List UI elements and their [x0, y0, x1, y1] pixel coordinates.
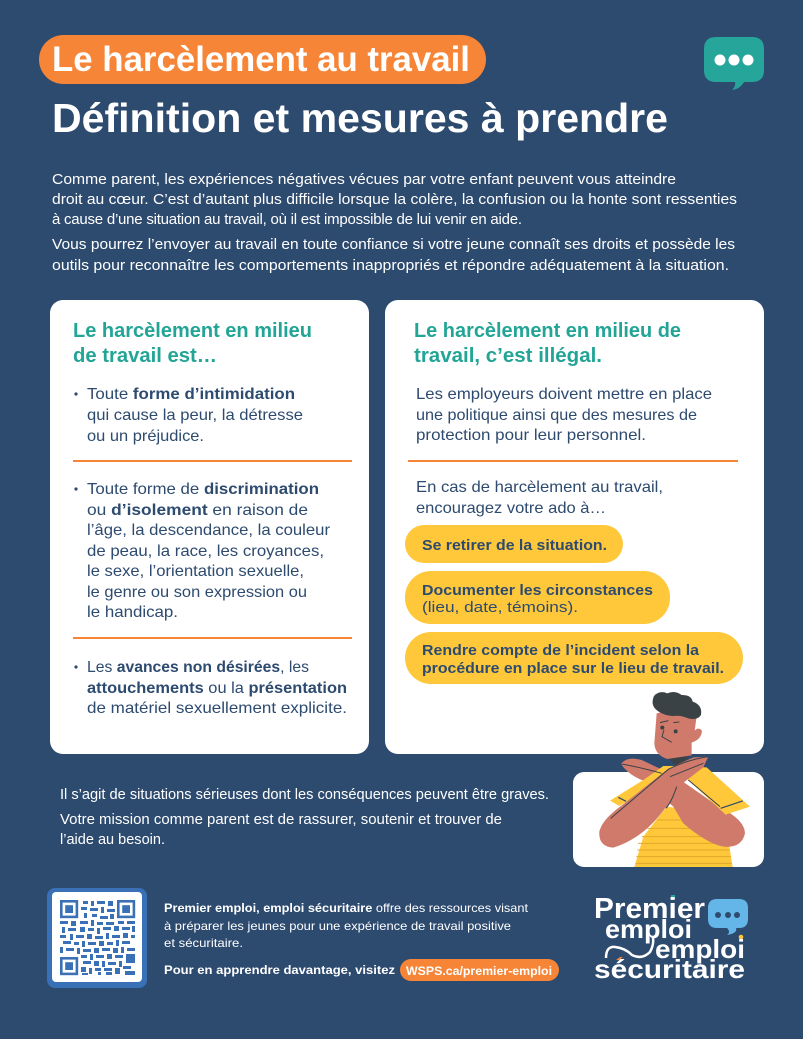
list item: intimidation: Toute forme d’intimidation — [87, 386, 295, 403]
intro text: à cause d’une situation au travail, où il est impossible de lui venir en aide. — [52, 211, 522, 228]
intro text: Vous pourrez l’envoyer au travail en toute confiance si votre jeune connaît ses droits et possède les — [52, 236, 735, 253]
list item: discrimination: ou d’isolement en raison de — [87, 502, 308, 519]
heading: illegal — [414, 320, 681, 367]
text: program description: Premier emploi, emploi sécuritaire offre des ressources visant — [164, 901, 529, 915]
text: employers: Les employeurs doivent mettre en place — [416, 386, 712, 403]
pill: step 3: Rendre compte de l’incident selon la — [422, 642, 700, 659]
pill: step 2: Documenter les circonstances — [422, 582, 653, 599]
list item: avances: Les avances non désirées, les — [87, 659, 309, 676]
list item: discrimination: le sexe, l’orientation sexuelle, — [87, 563, 304, 580]
list item: intimidation: qui cause la peur, la détresse — [87, 407, 303, 424]
logo: Premier emploi, emploi sécuritaire: Premier — [594, 893, 705, 925]
illustration: person crossing arms — [599, 692, 750, 867]
QR code — [47, 888, 147, 988]
text: encourage: En cas de harcèlement au travail, — [416, 479, 663, 496]
link pill — [400, 959, 559, 981]
text: encourage — [416, 479, 663, 517]
list item: discrimination: l’âge, la descendance, la couleur — [87, 522, 331, 539]
list item: avances — [74, 659, 347, 717]
text: program description: Pour en apprendre davantage, visitez — [164, 963, 395, 977]
list item: avances: attouchements ou la présentation — [87, 680, 347, 697]
list item: discrimination: le handicap. — [87, 604, 178, 621]
heading: definition: Le harcèlement en milieu — [73, 320, 312, 342]
text: encourage: encouragez votre ado à… — [416, 500, 606, 517]
logo: Premier emploi, emploi sécuritaire: emploi — [655, 934, 745, 964]
list item: intimidation: ou un préjudice. — [87, 428, 204, 445]
list item: avances: de matériel sexuellement explicite. — [87, 700, 347, 717]
heading: definition — [73, 320, 312, 367]
intro text: Comme parent, les expériences négatives vécues par votre enfant peuvent vous atteindre — [52, 171, 676, 188]
text: employers: une politique ainsi que des mesures de — [416, 407, 697, 424]
list item: intimidation — [74, 386, 303, 445]
heading: illegal: Le harcèlement en milieu de — [414, 320, 681, 342]
text: conclusion — [60, 786, 549, 848]
logo: Premier emploi, emploi sécuritaire — [594, 893, 748, 984]
heading: illegal: travail, c’est illégal. — [414, 345, 602, 367]
panel: definition — [50, 300, 369, 754]
list item: discrimination: le genre ou son expression ou — [87, 584, 307, 601]
panel: person background — [573, 772, 764, 867]
icon: chat bubble — [704, 37, 764, 90]
text: conclusion: Il s’agit de situations sérieuses dont les conséquences peuvent être graves. — [60, 786, 549, 803]
list item: discrimination — [74, 481, 331, 621]
list item: discrimination: Toute forme de discrimination — [87, 481, 319, 498]
logo: Premier emploi, emploi sécuritaire: emploi — [605, 914, 692, 944]
pill: step 3 — [405, 632, 743, 684]
text: conclusion: l’aide au besoin. — [60, 831, 165, 848]
text: conclusion: Votre mission comme parent est de rassurer, soutenir et trouver de — [60, 811, 502, 828]
list item: discrimination: de peau, la race, les croyances, — [87, 543, 324, 560]
link pill: WSPS.ca/premier-emploi — [406, 964, 552, 978]
logo: Premier emploi, emploi sécuritaire: sécuritaire — [594, 954, 745, 984]
pill: step 1: Se retirer de la situation. — [422, 537, 607, 554]
heading: definition: de travail est… — [73, 345, 217, 367]
intro text: outils pour reconnaître les comportements inappropriés et répondre adéquatement à la situation. — [52, 257, 729, 274]
pill: step 2: (lieu, date, témoins). — [422, 599, 578, 616]
text: program description — [164, 901, 529, 977]
text: employers: protection pour leur personnel. — [416, 427, 646, 444]
panel: illegal — [385, 300, 764, 754]
text: program description: à préparer les jeunes pour une expérience de travail positive — [164, 919, 511, 933]
pill: step 2 — [405, 571, 670, 624]
pill: step 1 — [405, 525, 623, 563]
heading: Définition et mesures à prendre: Définition et mesures à prendre — [52, 95, 668, 141]
text: program description: et sécuritaire. — [164, 936, 243, 950]
intro text: droit au cœur. C’est d’autant plus difficile lorsque la colère, la confusion ou la honte sont ressenties — [52, 191, 737, 208]
pill: step 3: procédure en place sur le lieu de travail. — [422, 660, 724, 677]
text: employers — [416, 386, 712, 444]
title pill: Le harcèlement au travail: Le harcèlement au travail — [52, 40, 470, 79]
intro text — [52, 171, 737, 274]
